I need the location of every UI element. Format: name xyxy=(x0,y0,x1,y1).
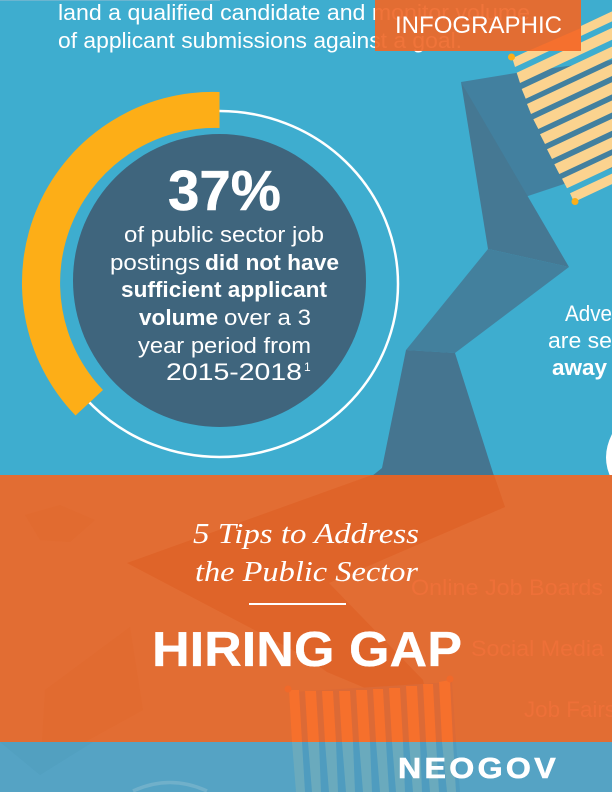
logo: NEOGOV: NEOGOV xyxy=(398,753,559,785)
illustration: cream stripes xyxy=(512,11,612,202)
right text fragment: away xyxy=(552,355,608,380)
stat description: year period from xyxy=(138,333,311,358)
background shape: stripe backdrop xyxy=(293,682,456,742)
stat description: volume xyxy=(139,305,218,330)
right text fragment xyxy=(548,301,612,380)
subtitle: 5 Tips to Address xyxy=(193,519,419,550)
icon: stripe end dots xyxy=(508,54,578,205)
panel: orange title band xyxy=(0,475,612,742)
background shape: megaphone shadow xyxy=(127,475,505,742)
faint channel labels: Social Media xyxy=(471,636,605,661)
background shape: footer triangle xyxy=(0,742,93,775)
stat description: postings xyxy=(110,250,200,275)
label: infographic banner: of applicant submissions against a goal. xyxy=(58,28,462,53)
label: infographic banner: INFOGRAPHIC xyxy=(395,12,562,39)
subtitle xyxy=(193,519,419,588)
chart: 37 percent ring xyxy=(22,92,398,457)
faint channel labels: Online Job Boards xyxy=(411,575,603,600)
faint channel labels: Job Fairs xyxy=(524,697,612,722)
subtitle: the Public Sector xyxy=(195,557,418,588)
stat description: 2015-2018 xyxy=(166,359,302,386)
icon: white circle edge xyxy=(606,434,612,480)
label: infographic banner: land a qualified candidate and monitor volume xyxy=(58,0,530,25)
stat description: of public sector job xyxy=(124,222,324,247)
stat description: 1 xyxy=(304,360,311,374)
stat: 37 percent: 37% xyxy=(168,159,281,223)
intro text: of applicant submissions against a goal. xyxy=(58,28,462,53)
illustration: orange stripes xyxy=(284,676,456,792)
stat description: did not have xyxy=(205,250,339,275)
background shape: faint left polygons xyxy=(25,505,143,742)
intro text xyxy=(58,4,422,52)
top edge strip xyxy=(0,0,220,1)
background shape: footer dark wedge xyxy=(300,742,460,792)
icon: footer circle arc xyxy=(133,782,207,791)
panel: blue footer band xyxy=(0,742,612,792)
faint channel labels xyxy=(411,575,612,722)
stat: 37 percent xyxy=(110,159,339,386)
right text fragment: are se xyxy=(548,328,612,353)
stat description: over a 3 xyxy=(224,305,311,330)
illustration: megaphone shape xyxy=(372,60,612,476)
title: HIRING GAP xyxy=(152,623,462,677)
stat description: sufficient applicant xyxy=(121,277,328,302)
label: infographic banner xyxy=(375,0,581,51)
stat description xyxy=(110,222,339,386)
intro text: land a qualified candidate and monitor volume xyxy=(58,0,530,25)
